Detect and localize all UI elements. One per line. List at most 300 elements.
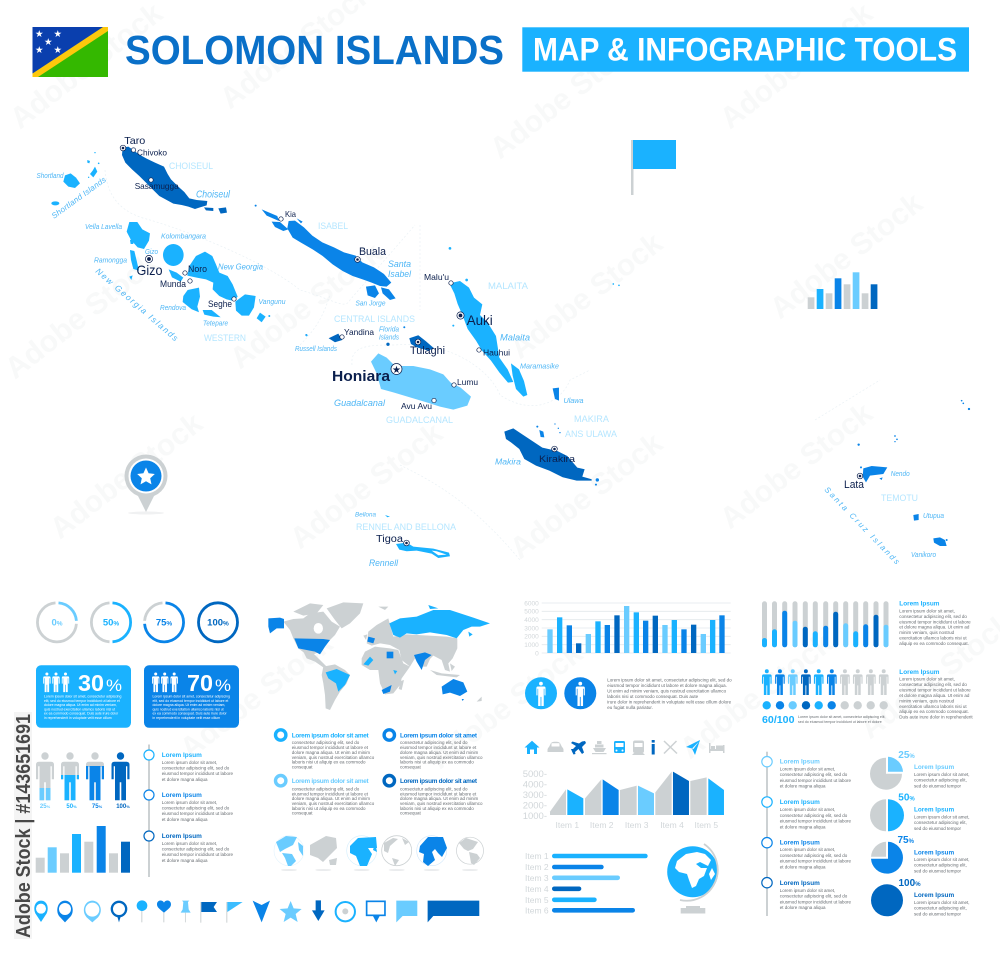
ring 50% bbox=[91, 603, 131, 642]
island labels: New Georgia bbox=[218, 262, 263, 272]
island labels: Bellona bbox=[355, 512, 376, 518]
legend item 2: laboris nisi ut aliquip ex ea commodo bbox=[400, 760, 474, 765]
pie 100% bbox=[871, 878, 970, 916]
island labels: Vangunu bbox=[258, 299, 286, 306]
text block: people row: Duis aute irure dolor in reprehenderit bbox=[899, 715, 973, 720]
legend item 1: veniam, quis nostrud exercitation ullamco bbox=[292, 755, 375, 760]
islands: Temotu bbox=[857, 400, 970, 546]
area chart: 2000- bbox=[523, 800, 547, 812]
timeline: left: eiusmod tempor incididunt ut labore bbox=[162, 771, 233, 776]
legend item 3: consequat bbox=[292, 811, 313, 816]
text block: center: Lorem ipsum dolor sit amet, consectetur adipiscing elit, sed do bbox=[607, 678, 732, 683]
pie 25%: consectetur adipiscing elit, bbox=[914, 778, 967, 783]
legend item 4: veniam, quis nostrud exercitation ullamco bbox=[400, 801, 483, 806]
area chart: Item 4 bbox=[660, 820, 684, 830]
legend item 1: consequat bbox=[292, 764, 313, 769]
watermark: Adobe Stock bbox=[764, 186, 929, 326]
arrowhead bbox=[253, 901, 270, 922]
watermark: Adobe Stock bbox=[284, 416, 449, 556]
pie 100%: Lorem Ipsum bbox=[914, 892, 954, 899]
icon: location pin with star bbox=[124, 454, 168, 514]
province labels: TEMOTU bbox=[881, 493, 918, 504]
city labels: Noro bbox=[188, 264, 207, 274]
globe 4 bbox=[382, 836, 412, 871]
icon: train bbox=[632, 740, 645, 755]
people row: 60/100: Lorem ipsum dolor sit amet, consectetur adipiscing elit, bbox=[798, 715, 886, 719]
timeline: left: et dolore magna aliqua bbox=[162, 817, 208, 822]
legend item 3: Lorem ipsum dolor sit amet bbox=[292, 778, 370, 785]
pie 25%: Lorem Ipsum bbox=[914, 764, 954, 771]
legend item 1: laboris nisi ut aliquip ex ea commodo bbox=[292, 760, 366, 765]
legend item 4: consequat bbox=[400, 811, 422, 816]
text block: people row: Lorem Ipsum bbox=[899, 669, 940, 676]
city labels: Taro bbox=[124, 135, 145, 147]
panel: 70%: quis nostrud exercitation ullamco laboris nisi ut bbox=[152, 707, 224, 711]
pin 2 bbox=[57, 901, 73, 922]
people percentage chart: 75% bbox=[92, 804, 103, 810]
boundary lines bbox=[105, 170, 880, 560]
panel: 30%: 30 bbox=[78, 670, 104, 696]
legend item 3: eiusmod tempor incididunt ut labore et bbox=[292, 791, 369, 796]
stock id text: Adobe Stock | #143651691 bbox=[13, 714, 35, 938]
islands: western group bbox=[51, 147, 451, 351]
city labels: Chivoko bbox=[137, 148, 167, 158]
text block: people row: minim veniam, quis nostrud bbox=[899, 698, 955, 703]
bar chart: top center: 1000 bbox=[524, 642, 539, 649]
timeline: right: eiusmod tempor incididunt ut labore bbox=[780, 778, 851, 783]
watermark: Adobe Stock bbox=[44, 406, 209, 546]
watermark: Adobe Stock bbox=[174, 626, 339, 766]
watermark: Adobe Stock bbox=[714, 396, 879, 536]
text block: people row: eiusmod tempor incididunt ut labore bbox=[899, 687, 971, 692]
city markers bbox=[120, 145, 863, 546]
city markers: ★ bbox=[392, 365, 401, 376]
timeline: left: Lorem ipsum dolor sit amet, bbox=[162, 800, 217, 805]
text block: center: Ut enim ad minim veniam, quis nostrud exercitation ullamco bbox=[607, 688, 727, 694]
title: SOLOMON ISLANDS bbox=[125, 27, 504, 73]
horizontal bars: Item 6 bbox=[525, 906, 549, 916]
area chart: 4000- bbox=[523, 780, 547, 790]
area chart: 5000- bbox=[523, 769, 547, 780]
island labels: Rennell bbox=[369, 558, 399, 568]
map of Solomon Islands bbox=[36, 135, 970, 568]
city labels: Hauhui bbox=[483, 348, 510, 358]
text block: people row: Lorem ipsum dolor sit amet, bbox=[899, 676, 955, 682]
world map bbox=[268, 602, 490, 710]
timeline: right: et dolore magna aliqua bbox=[780, 784, 826, 789]
island labels: Shortland bbox=[36, 173, 64, 180]
horizontal bars: Item 3 bbox=[525, 873, 549, 883]
legend item 3 bbox=[276, 776, 375, 816]
legend item 2: eiusmod tempor incididunt ut labore et bbox=[400, 745, 477, 750]
island labels: Utupua bbox=[923, 513, 944, 520]
province labels: RENNEL AND BELLONA bbox=[356, 522, 457, 533]
island labels: Makira bbox=[495, 456, 521, 466]
island labels: Guadalcanal bbox=[334, 398, 386, 409]
icon: ship bbox=[592, 741, 606, 754]
heart pin bbox=[157, 901, 171, 922]
legend item 3: veniam, quis nostrud exercitation ullamco bbox=[292, 801, 375, 806]
icons row: map pins and markers bbox=[34, 900, 479, 923]
timeline: left: Lorem Ipsum bbox=[162, 792, 202, 799]
watermark: Adobe Stock bbox=[714, 0, 879, 136]
text block: people row: et dolore magna aliqua. Ut enim ad bbox=[899, 693, 970, 698]
world map legend bbox=[276, 730, 483, 816]
island labels: Gizo bbox=[145, 249, 158, 256]
horizontal bars: Item 1 bbox=[525, 851, 549, 861]
people percentage chart bbox=[36, 752, 130, 810]
legend item 2: Lorem ipsum dolor sit amet bbox=[400, 732, 478, 740]
ring 100% bbox=[198, 603, 238, 642]
panel: 70%: elit, sed do eiusmod tempor incididunt ut labore et bbox=[152, 699, 228, 703]
globe 2 bbox=[310, 836, 337, 871]
province labels: ANS ULAWA bbox=[565, 429, 618, 440]
timeline: left: Lorem ipsum dolor sit amet, bbox=[162, 760, 217, 765]
ring 0%: 0% bbox=[51, 618, 63, 628]
flag of Solomon Islands: ★ bbox=[54, 29, 62, 40]
icon: flag marker bbox=[631, 140, 676, 195]
text block: pill chart: minim veniam, quis nostrud bbox=[899, 630, 955, 635]
watermark: Adobe Stock bbox=[504, 226, 669, 366]
pie 100%: 100% bbox=[898, 878, 921, 889]
icon: bed bbox=[709, 743, 724, 753]
flag of Solomon Islands: ★ bbox=[35, 29, 44, 40]
icon: paper plane bbox=[686, 740, 700, 755]
timeline: right: Lorem ipsum dolor sit amet, bbox=[780, 847, 835, 852]
island labels: Shortland Islands bbox=[50, 175, 108, 221]
pie 25%: 25% bbox=[898, 750, 915, 761]
pill chart bbox=[762, 601, 888, 647]
watermark: Adobe Stock bbox=[424, 636, 589, 776]
mini bar chart bbox=[808, 272, 877, 309]
pie 75%: consectetur adipiscing elit, bbox=[914, 863, 967, 868]
island labels: New Georgia Islands bbox=[94, 266, 181, 344]
city labels: Munda bbox=[160, 279, 186, 289]
island labels: Kolombangara bbox=[161, 234, 206, 240]
timeline: right: et dolore magna aliqua bbox=[780, 905, 826, 910]
speech bubble light bbox=[396, 901, 417, 922]
area chart: 3000- bbox=[523, 790, 547, 801]
text block: pill chart: et dolore magna aliqua. Ut enim ad bbox=[899, 625, 970, 630]
pie 75%: Lorem Ipsum bbox=[914, 849, 954, 856]
province labels: CENTRAL ISLANDS bbox=[334, 314, 415, 325]
legend item 1 bbox=[276, 730, 375, 769]
text block: center: laboris nisi ut commodo consequat. Duis aute bbox=[607, 694, 699, 699]
legend item 1: dolore magna aliqua. Ut enim ad minim bbox=[292, 750, 370, 755]
timeline: right bbox=[762, 752, 851, 916]
city labels: Sasamugga bbox=[135, 181, 179, 191]
city labels: Malu'u bbox=[424, 272, 449, 282]
city labels: Yandina bbox=[344, 327, 374, 337]
island labels: Vella Lavella bbox=[85, 224, 122, 231]
pie 100%: Lorem ipsum dolor sit amet, bbox=[914, 900, 970, 905]
island labels: Choiseul bbox=[196, 190, 231, 200]
timeline: left: consectetur adipiscing elit, sed do bbox=[162, 806, 230, 811]
bar chart: left bbox=[36, 826, 130, 873]
horizontal bars bbox=[525, 851, 648, 916]
island labels: Rendova bbox=[160, 305, 186, 312]
panel: 70%: 70 bbox=[187, 670, 213, 696]
timeline: left: eiusmod tempor incididunt ut labore bbox=[162, 852, 233, 857]
speech bubble dark bbox=[428, 901, 479, 922]
pie 75%: sed do eiusmod tempor bbox=[914, 868, 962, 873]
pin 4 bbox=[111, 901, 127, 922]
people percentage chart: 25% bbox=[40, 804, 51, 810]
city labels: Seghe bbox=[208, 299, 232, 309]
icon: bus bbox=[614, 741, 625, 753]
area chart: 1000- bbox=[523, 811, 547, 822]
bar chart: top center: 6000 bbox=[524, 600, 539, 607]
island labels: Tetepare bbox=[203, 320, 228, 328]
star bbox=[280, 901, 302, 922]
timeline: right: Lorem Ipsum bbox=[780, 839, 820, 846]
pie 75%: Lorem ipsum dolor sit amet, bbox=[914, 857, 970, 862]
timeline: right: consectetur adipiscing elit, sed do bbox=[780, 772, 848, 777]
legend item 3: laboris nisi ut aliquip ex ea commodo bbox=[292, 806, 366, 811]
timeline: left: et dolore magna aliqua bbox=[162, 777, 208, 782]
city labels: Kia bbox=[285, 209, 296, 219]
text block: people row: aliquip ex ea commodo consequat. bbox=[899, 709, 969, 714]
pie charts bbox=[870, 750, 970, 916]
legend item 2 bbox=[384, 730, 483, 769]
legend item 4: Lorem ipsum dolor sit amet bbox=[400, 778, 478, 785]
timeline: left: et dolore magna aliqua bbox=[162, 858, 208, 863]
bar chart: top center: 0 bbox=[535, 650, 539, 657]
text block: pill chart bbox=[899, 600, 971, 646]
pie 50%: sed do eiusmod tempor bbox=[914, 826, 962, 831]
icon: cutlery bbox=[664, 741, 677, 754]
flag dark bbox=[200, 902, 217, 923]
text block: pill chart: consectetur adipiscing elit, sed do bbox=[899, 614, 967, 619]
pie 75%: 75% bbox=[898, 835, 915, 846]
people row: 60/100 bbox=[762, 669, 889, 726]
legend item 3: dolore magna aliqua. Ut enim ad minim bbox=[292, 796, 370, 801]
province labels: WESTERN bbox=[204, 333, 246, 344]
bar chart: top center bbox=[524, 600, 731, 657]
pie 50% bbox=[870, 793, 970, 831]
flag of Solomon Islands bbox=[32, 27, 108, 77]
push pin bbox=[181, 901, 191, 922]
timeline: left: consectetur adipiscing elit, sed do bbox=[162, 766, 230, 771]
island labels bbox=[36, 173, 944, 568]
watermark: Adobe Stock bbox=[4, 0, 169, 136]
island labels: Malaita bbox=[500, 332, 530, 342]
horizontal bars: Item 4 bbox=[525, 884, 549, 894]
legend item 2: veniam, quis nostrud exercitation ullamco bbox=[400, 755, 483, 760]
legend item 1: Lorem ipsum dolor sit amet bbox=[292, 732, 370, 740]
legend item 3: consectetur adipiscing elit, sed do bbox=[292, 786, 359, 791]
island labels: Santa bbox=[388, 259, 411, 270]
pie 25% bbox=[870, 750, 970, 790]
area chart: Item 2 bbox=[590, 820, 614, 830]
people percentage chart: 100% bbox=[116, 804, 130, 810]
island labels: Vanikoro bbox=[911, 552, 936, 559]
legend item 2: consequat bbox=[400, 764, 422, 769]
watermark: Adobe Stock bbox=[0, 246, 164, 386]
people row: 60/100: 60/100 bbox=[762, 714, 795, 726]
island labels: Santa Cruz Islands bbox=[823, 485, 901, 566]
legend item 4: eiusmod tempor incididunt ut labore et bbox=[400, 791, 477, 796]
pie 50%: consectetur adipiscing elit, bbox=[914, 820, 967, 825]
city labels: Lumu bbox=[457, 378, 478, 387]
globe 3 bbox=[347, 836, 377, 871]
text block: people row: exercitation ullamco laboris nisi ut bbox=[899, 704, 967, 709]
icon: home bbox=[524, 741, 540, 754]
horizontal bars: Item 2 bbox=[525, 862, 549, 872]
panel: 30%: elit, sed do eiusmod tempor incididunt ut labore et bbox=[44, 699, 120, 703]
panel: 70%: ex ea commodo consequat. Duis aute irure dolor bbox=[152, 712, 227, 716]
bar chart: top center: 5000 bbox=[524, 609, 539, 616]
speech bubble outline bbox=[367, 901, 385, 922]
timeline: right: Lorem Ipsum bbox=[780, 880, 820, 887]
timeline: right: et dolore magna aliqua bbox=[780, 864, 826, 869]
panel: 70%: in reprehenderit in voluptate velit esse cillum bbox=[152, 716, 220, 720]
legend item 4 bbox=[384, 776, 483, 816]
horizontal bars: Item 5 bbox=[525, 895, 549, 905]
pie 50%: Lorem Ipsum bbox=[914, 807, 954, 814]
timeline: right: consectetur adipiscing elit, sed do bbox=[780, 853, 848, 858]
province labels bbox=[169, 161, 918, 533]
watermark: Adobe Stock bbox=[674, 626, 839, 766]
icon: car bbox=[548, 742, 564, 752]
progress rings bbox=[37, 603, 237, 642]
timeline: right: consectetur adipiscing elit, sed do bbox=[780, 813, 848, 818]
city labels bbox=[124, 135, 865, 545]
timeline: left: Lorem Ipsum bbox=[162, 752, 202, 759]
city labels: Lata bbox=[844, 479, 865, 491]
city labels: Buala bbox=[359, 246, 387, 258]
timeline: left: consectetur adipiscing elit, sed do bbox=[162, 847, 230, 852]
banner: MAP & INFOGRAPHIC TOOLS bbox=[533, 32, 957, 68]
text block: center: eiusmod tempor incididunt ut labore et dolore magna aliqua. bbox=[607, 683, 727, 688]
island labels: Nendo bbox=[891, 471, 910, 478]
city labels: Honiara bbox=[332, 368, 391, 385]
province labels: GUADALCANAL bbox=[386, 415, 453, 426]
ring 50%: 50% bbox=[103, 618, 119, 628]
legend item 1: consectetur adipiscing elit, sed do bbox=[292, 740, 359, 745]
flag light bbox=[226, 902, 243, 923]
timeline: left bbox=[144, 744, 233, 877]
timeline: right: eiusmod tempor incididunt ut labore bbox=[780, 899, 851, 904]
timeline: right: eiusmod tempor incididunt ut labore bbox=[780, 819, 851, 824]
island labels: Ramongga bbox=[94, 258, 127, 264]
text block: center: irure dolor in reprehenderit in voluptate velit esse cillum dolore bbox=[607, 699, 732, 704]
timeline: right: Lorem ipsum dolor sit amet, bbox=[780, 807, 835, 812]
legend item 1: eiusmod tempor incididunt ut labore et bbox=[292, 745, 369, 750]
panel: 70%: dolore magna aliqua. Ut enim ad minim veniam, bbox=[152, 703, 225, 707]
pie 50%: Lorem ipsum dolor sit amet, bbox=[914, 814, 970, 820]
travel icons row bbox=[524, 740, 724, 755]
timeline: right: Lorem Ipsum bbox=[780, 758, 820, 765]
watermark: Adobe Stock bbox=[484, 26, 649, 166]
area chart: Item 1 bbox=[555, 820, 579, 830]
text block: people row bbox=[899, 669, 973, 720]
text block: pill chart: aliquip ex ea commodo consequat. bbox=[899, 641, 969, 646]
island labels: Ulawa bbox=[564, 398, 584, 405]
text block: pill chart: exercitation ullamco laboris nisi ut bbox=[899, 636, 967, 640]
pin 3 bbox=[84, 901, 101, 922]
people circles bbox=[525, 677, 596, 709]
island labels: Russell Islands bbox=[295, 346, 337, 353]
area chart: Item 3 bbox=[625, 820, 649, 830]
text block: pill chart: Lorem Ipsum bbox=[899, 600, 940, 608]
globe 5 bbox=[417, 836, 447, 871]
city labels: Avu Avu bbox=[401, 402, 432, 411]
panel: 30%: Lorem ipsum dolor sit amet, consectetur adipiscing bbox=[44, 694, 121, 698]
people row: 60/100: sed do eiusmod tempor incididunt ut labore et dolore bbox=[798, 720, 882, 724]
flag of Solomon Islands: ★ bbox=[54, 45, 62, 56]
province labels: MAKIRA bbox=[574, 414, 610, 425]
pin 1 bbox=[34, 901, 48, 922]
watermark: Adobe Stock bbox=[504, 426, 669, 566]
timeline: left: eiusmod tempor incididunt ut labore bbox=[162, 811, 233, 816]
timeline: left: Lorem ipsum dolor sit amet, bbox=[162, 841, 217, 846]
panel: 30%: in reprehenderit in voluptate velit esse cillum bbox=[44, 716, 112, 720]
island labels: Maramasike bbox=[520, 364, 559, 370]
bar chart: top center: 3000 bbox=[524, 625, 539, 632]
text block: people row: consectetur adipiscing elit, sed do bbox=[899, 682, 967, 687]
icon: info bbox=[652, 740, 655, 754]
timeline: left: Lorem Ipsum bbox=[162, 833, 202, 840]
pie 25%: Lorem ipsum dolor sit amet, bbox=[914, 772, 970, 777]
legend item 2: consectetur adipiscing elit, sed do bbox=[400, 740, 468, 745]
pie 75% bbox=[871, 835, 970, 874]
panel: 70%: Lorem ipsum dolor sit amet, consectetur adipiscing bbox=[152, 694, 230, 698]
watermark: Adobe Stock bbox=[224, 236, 389, 376]
panel: 30%: quis nostrud exercitation ullamco laboris nisi ut bbox=[44, 707, 115, 711]
timeline: right: consectetur adipiscing elit, sed do bbox=[780, 894, 848, 899]
pie 100%: sed do eiusmod tempor bbox=[914, 911, 962, 916]
area chart: Item 5 bbox=[694, 820, 718, 830]
area chart bbox=[523, 769, 724, 830]
flag of Solomon Islands: ★ bbox=[35, 45, 44, 56]
panel: 30%: dolore magna aliqua. Ut enim ad minim veniam, bbox=[44, 703, 117, 707]
ring 100%: 100% bbox=[207, 618, 229, 628]
icon: desk globe bbox=[667, 844, 718, 914]
island labels: San Jorge bbox=[356, 298, 386, 308]
ring 75%: 75% bbox=[156, 618, 172, 628]
ring 75% bbox=[145, 603, 184, 642]
globe 1 bbox=[274, 836, 304, 871]
ring 0% bbox=[37, 603, 76, 642]
target bbox=[336, 902, 355, 921]
panel: 30%: % bbox=[106, 676, 122, 695]
timeline: right: eiusmod tempor incididunt ut labore bbox=[780, 859, 851, 864]
city labels: Gizo bbox=[136, 262, 163, 278]
panel: 70% bbox=[144, 665, 239, 728]
text block: center: eu fugiat nulla pariatur. bbox=[607, 705, 653, 710]
text block: pill chart: eiusmod tempor incididunt ut labore bbox=[899, 619, 971, 624]
province labels: ISABEL bbox=[318, 221, 348, 232]
legend item 4: dolore magna aliqua. Ut enim ad minim bbox=[400, 796, 479, 801]
text block: pill chart: Lorem ipsum dolor sit amet, bbox=[899, 608, 955, 614]
globes row bbox=[274, 836, 484, 871]
province labels: CHOISEUL bbox=[169, 161, 213, 172]
arrow down bbox=[312, 900, 325, 921]
island labels: Islands bbox=[379, 334, 399, 342]
islands: central and eastern group bbox=[306, 279, 620, 558]
city labels: Kirakira bbox=[539, 454, 576, 465]
timeline: right: et dolore magna aliqua bbox=[780, 824, 826, 829]
pie 100%: consectetur adipiscing elit, bbox=[914, 906, 967, 911]
island labels: Florida bbox=[379, 326, 399, 334]
timeline: right: Lorem Ipsum bbox=[780, 799, 820, 806]
city labels: Tigoa bbox=[376, 534, 403, 545]
globe 6 bbox=[456, 837, 484, 871]
legend item 4: consectetur adipiscing elit, sed do bbox=[400, 786, 468, 791]
people percentage chart: 50% bbox=[66, 804, 77, 810]
panel: 70%: % bbox=[215, 676, 231, 695]
